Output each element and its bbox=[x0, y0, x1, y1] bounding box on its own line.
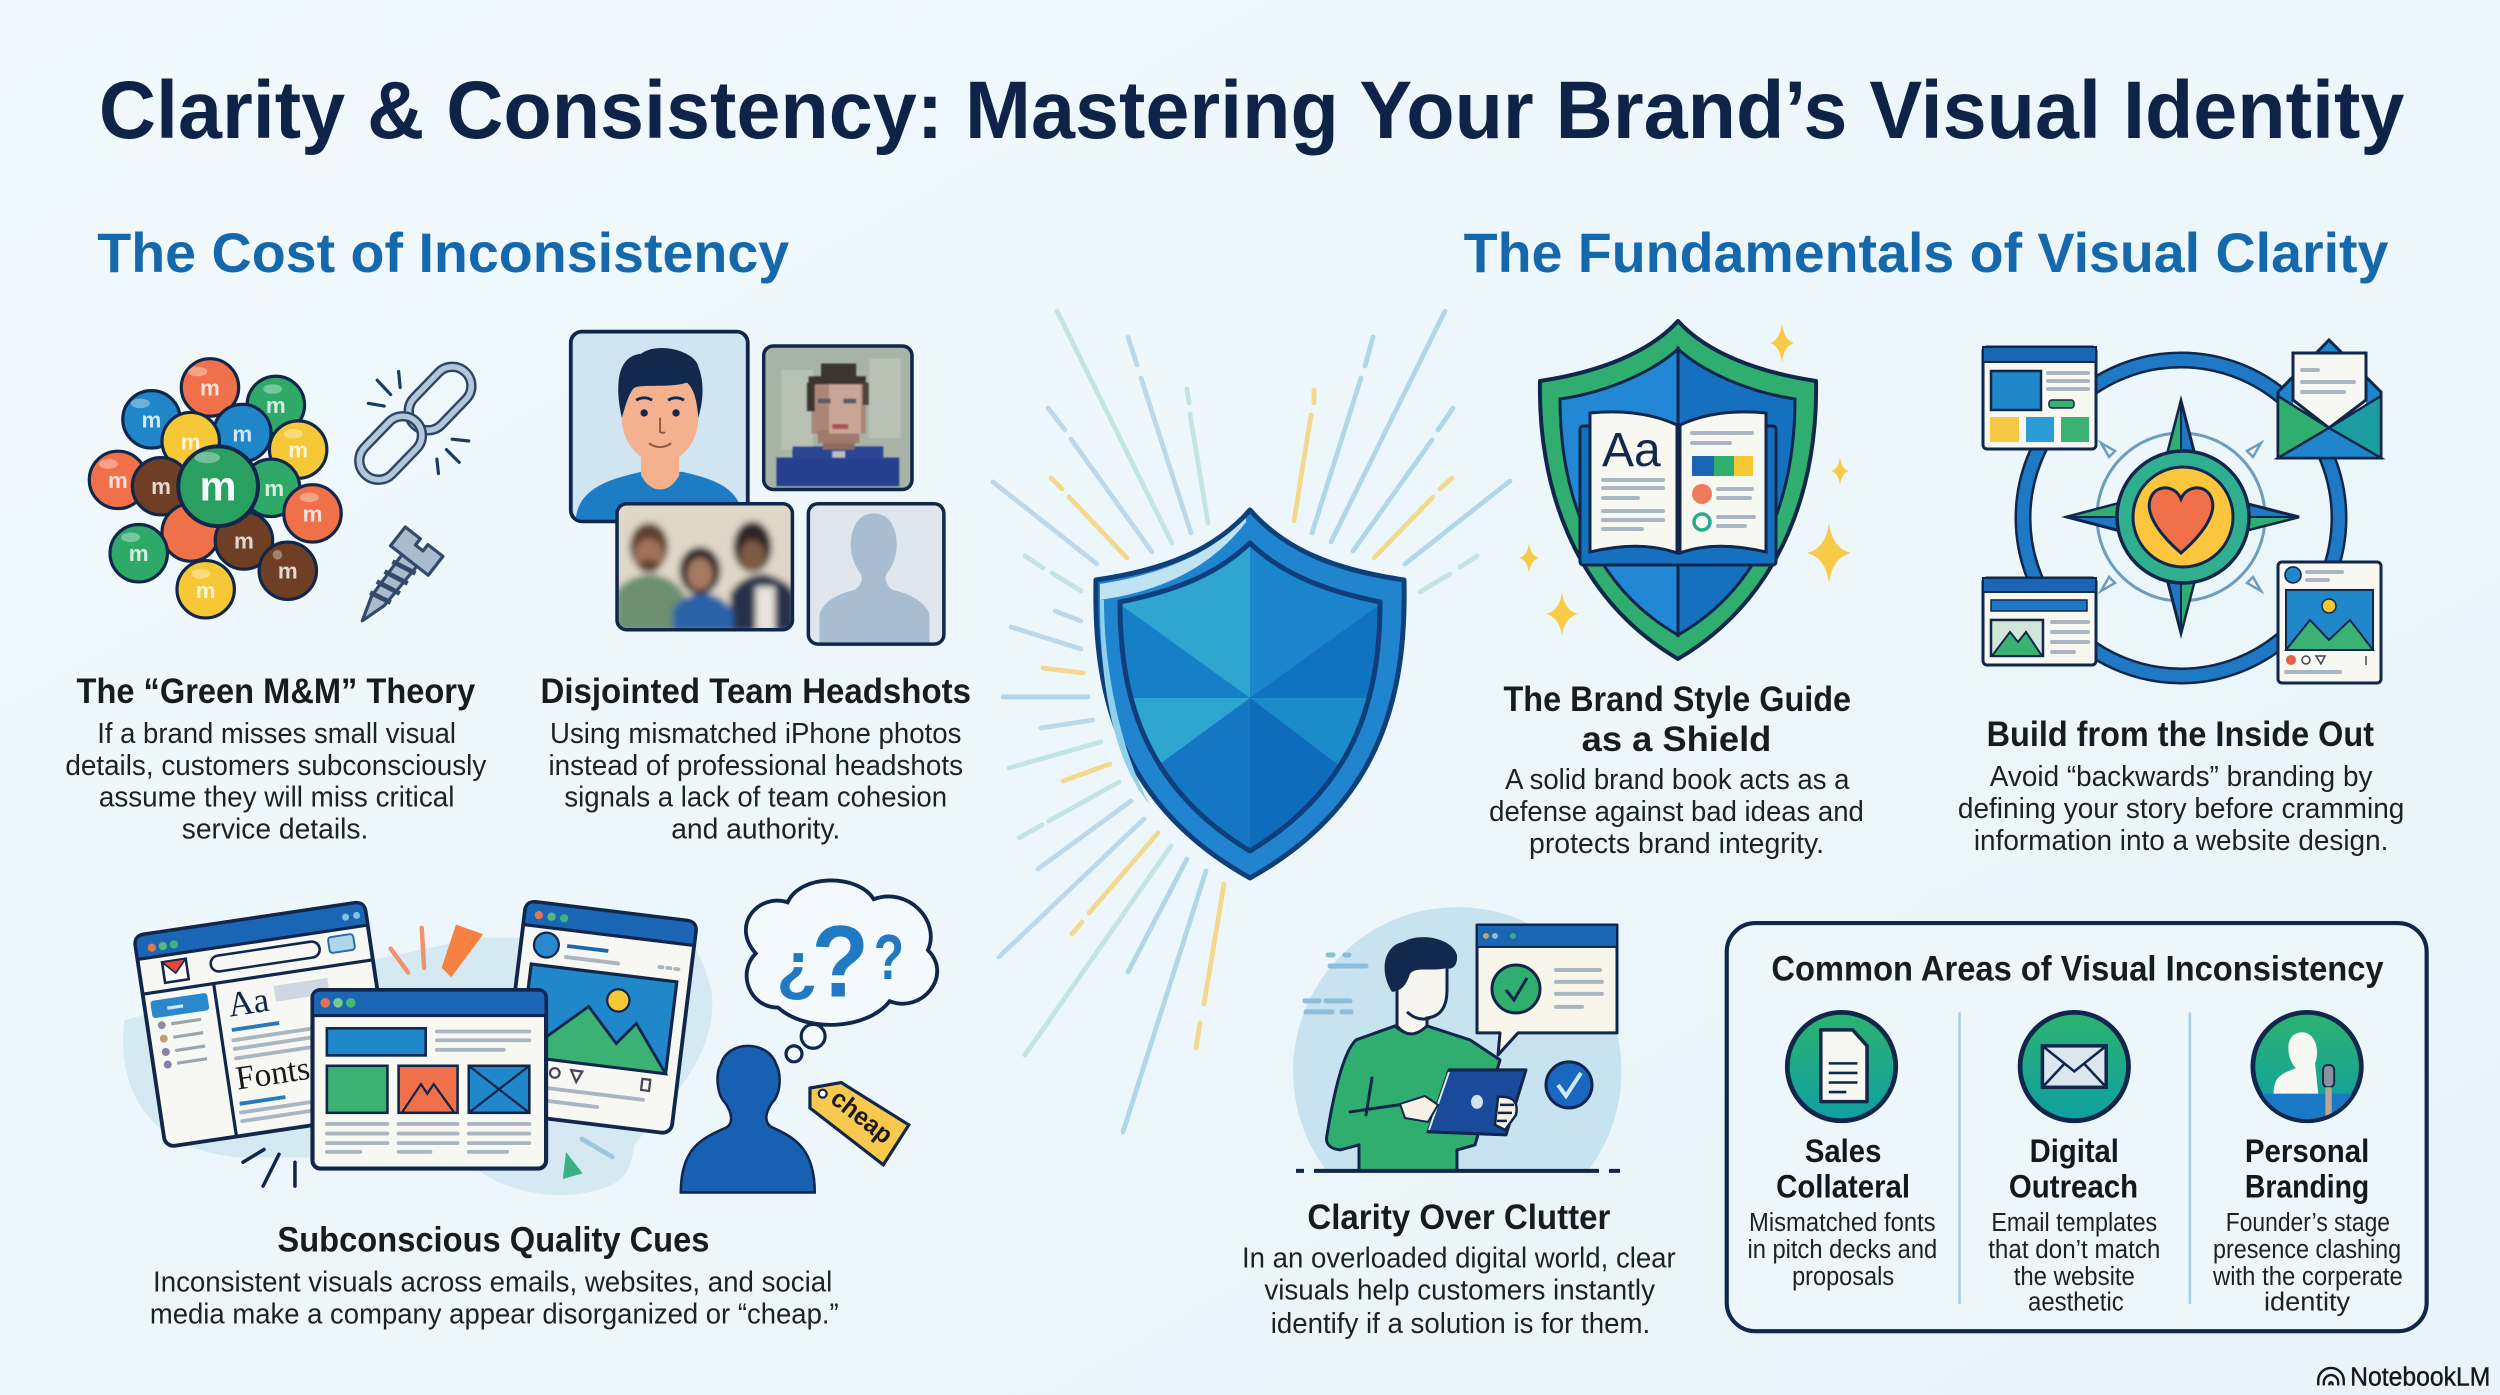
icon: thought bubble with question marks: ? bbox=[812, 904, 869, 1018]
tablet bbox=[1428, 1070, 1526, 1135]
column: digital outreach: that don’t match bbox=[1988, 1236, 2160, 1264]
photo: blank profile silhouette bbox=[808, 504, 944, 644]
text: brand style guide as a shield: defense against bad ideas and bbox=[1489, 796, 1864, 828]
column: sales collateral: in pitch decks and bbox=[1747, 1236, 1937, 1264]
icon: broken chain bbox=[351, 359, 479, 488]
column: sales collateral: Collateral bbox=[1776, 1167, 1910, 1204]
heading: the cost of inconsistency: The Cost of Inconsistency bbox=[97, 221, 789, 284]
illustration: email browser window: Fonts bbox=[233, 1050, 312, 1098]
open book: Aa bbox=[1602, 424, 1661, 477]
sparkles bbox=[1519, 323, 1851, 636]
text: brand style guide as a shield: The Brand Style Guide bbox=[1504, 680, 1851, 719]
green torso bbox=[1327, 1026, 1500, 1171]
illustration: social post window bbox=[500, 901, 697, 1134]
column: personal branding bbox=[2212, 1012, 2403, 1317]
text: clarity over clutter: identify if a solution is for them. bbox=[1271, 1308, 1650, 1340]
icon: pile of candies: m bbox=[181, 430, 201, 455]
motion dashes bbox=[1305, 955, 1366, 1012]
text: build from the inside out: Avoid “backwards” branding by bbox=[1990, 761, 2373, 793]
text: clarity over clutter bbox=[1242, 1198, 1676, 1340]
icon: pile of candies bbox=[89, 359, 341, 618]
icon: pile of candies: m bbox=[151, 474, 171, 499]
column: digital outreach: aesthetic bbox=[2028, 1289, 2124, 1317]
head bbox=[1397, 960, 1447, 1034]
column: digital outreach bbox=[1988, 1012, 2160, 1317]
icon: customer silhouette bbox=[681, 1046, 815, 1193]
central shield with radiating rays bbox=[993, 311, 1510, 1132]
column: personal branding: Founder’s stage bbox=[2226, 1209, 2390, 1237]
text: clarity over clutter: visuals help customers instantly bbox=[1264, 1274, 1656, 1306]
top-right envelope card bbox=[2278, 340, 2381, 458]
illustration: central website window bbox=[312, 990, 546, 1169]
text: green m&m theory: details, customers subconsciously bbox=[65, 750, 487, 782]
icon: screw bbox=[343, 527, 443, 636]
check badge bbox=[1546, 1062, 1592, 1108]
column: personal branding: identity bbox=[2264, 1289, 2350, 1317]
text: clarity over clutter: Clarity Over Clutter bbox=[1307, 1198, 1611, 1237]
bottom-left landing page card bbox=[1983, 578, 2096, 665]
text: green m&m theory: If a brand misses small visual bbox=[97, 718, 456, 750]
column: personal branding: Branding bbox=[2245, 1167, 2369, 1204]
column: personal branding: presence clashing bbox=[2213, 1236, 2401, 1264]
icon: pile of candies: m bbox=[129, 541, 149, 566]
text: disjointed team headshots: Disjointed Team Headshots bbox=[540, 672, 971, 711]
text: build from the inside out: information into a website design. bbox=[1974, 825, 2388, 857]
column: sales collateral: proposals bbox=[1792, 1263, 1894, 1291]
photo: professional headshot bbox=[571, 332, 748, 521]
text: disjointed team headshots: signals a lack of team cohesion bbox=[564, 782, 947, 814]
photo: pixelated selfie bbox=[764, 346, 912, 489]
logo: notebooklm: NotebookLM bbox=[2350, 1363, 2490, 1391]
panel: common areas of visual inconsistency bbox=[1727, 923, 2427, 1331]
text: subconscious quality cues: Inconsistent visuals across emails, websites, and social bbox=[153, 1266, 832, 1298]
text: subconscious quality cues: media make a company appear disorganized or “cheap.” bbox=[150, 1298, 839, 1330]
column: sales collateral bbox=[1747, 1012, 1937, 1291]
heading: the fundamentals of visual clarity: The Fundamentals of Visual Clarity bbox=[1464, 221, 2388, 284]
text: disjointed team headshots: instead of professional headshots bbox=[548, 750, 963, 782]
icon: cheap price tag bbox=[810, 1083, 909, 1165]
text: brand style guide as a shield: as a Shield bbox=[1582, 720, 1771, 759]
text: disjointed team headshots bbox=[540, 672, 971, 846]
text: brand style guide as a shield: protects brand integrity. bbox=[1529, 828, 1824, 860]
text: brand style guide as a shield bbox=[1489, 680, 1864, 860]
text: disjointed team headshots: and authority. bbox=[671, 814, 840, 846]
icon: pile of candies: m bbox=[232, 422, 252, 447]
icon: cheap price tag: cheap bbox=[825, 1084, 898, 1150]
column: digital outreach: Email templates bbox=[1991, 1209, 2157, 1237]
icon: pile of candies: m bbox=[303, 501, 322, 526]
illustration: email browser window bbox=[134, 901, 396, 1147]
text: green m&m theory: service details. bbox=[182, 814, 368, 846]
column: digital outreach: Outreach bbox=[2009, 1167, 2138, 1204]
open book bbox=[1580, 412, 1776, 565]
text: brand style guide as a shield: A solid brand book acts as a bbox=[1505, 764, 1850, 796]
background blob behind windows bbox=[123, 937, 712, 1195]
text: subconscious quality cues: Subconscious Quality Cues bbox=[277, 1221, 710, 1260]
text: build from the inside out: Build from the Inside Out bbox=[1987, 715, 2374, 754]
photo: blurry group bbox=[606, 504, 805, 631]
text: green m&m theory: The “Green M&M” Theory bbox=[77, 672, 476, 711]
icon: pile of candies: m bbox=[196, 578, 216, 603]
rays bbox=[993, 311, 1510, 1132]
text: build from the inside out: defining your story before cramming bbox=[1958, 793, 2404, 825]
text: green m&m theory: assume they will miss critical bbox=[99, 782, 454, 814]
icon: thought bubble with question marks bbox=[746, 880, 937, 1062]
icon: pile of candies: m bbox=[108, 468, 128, 493]
icon: thought bubble with question marks: ¿ bbox=[776, 928, 817, 1003]
column: digital outreach: the website bbox=[2014, 1263, 2135, 1291]
illustration: email browser window: Aa bbox=[225, 980, 272, 1025]
column: personal branding: with the corperate bbox=[2212, 1263, 2403, 1291]
icon: pile of candies: m bbox=[288, 438, 308, 463]
icon: pile of candies: m bbox=[142, 407, 161, 432]
column: personal branding: Personal bbox=[2245, 1132, 2369, 1169]
icon: thought bubble with question marks: ? bbox=[874, 921, 904, 993]
icon: pile of candies: m bbox=[278, 559, 298, 584]
speech window bbox=[1477, 925, 1617, 1055]
top-left website card bbox=[1983, 347, 2096, 449]
text: disjointed team headshots: Using mismatched iPhone photos bbox=[550, 718, 961, 750]
icon: pile of candies: m bbox=[234, 528, 254, 553]
icon: accent sparks bbox=[243, 925, 612, 1186]
column: sales collateral: Mismatched fonts bbox=[1749, 1209, 1936, 1237]
icon: pile of candies: m bbox=[266, 393, 286, 418]
shield bbox=[1096, 510, 1404, 878]
bottom-right social card bbox=[2278, 562, 2381, 683]
text: clarity over clutter: In an overloaded digital world, clear bbox=[1242, 1242, 1676, 1274]
icon: style guide shield with book bbox=[1519, 321, 1851, 659]
text: build from the inside out bbox=[1958, 715, 2404, 857]
title: Clarity & Consistency: Mastering Your Brand’s Visual Identity bbox=[99, 65, 2404, 156]
illustration: person with tablet bbox=[1293, 907, 1622, 1173]
column: digital outreach: Digital bbox=[2030, 1132, 2119, 1169]
text: subconscious quality cues bbox=[150, 1221, 839, 1330]
panel heading: Common Areas of Visual Inconsistency bbox=[1771, 949, 2384, 988]
icon: pile of candies: m bbox=[264, 476, 284, 501]
column: sales collateral: Sales bbox=[1805, 1132, 1881, 1169]
icon: pile of candies: m bbox=[200, 463, 237, 510]
icon: pile of candies: m bbox=[200, 375, 220, 400]
text: green m&m theory bbox=[65, 672, 487, 846]
icon: compass with surrounding touchpoints bbox=[1983, 340, 2381, 683]
